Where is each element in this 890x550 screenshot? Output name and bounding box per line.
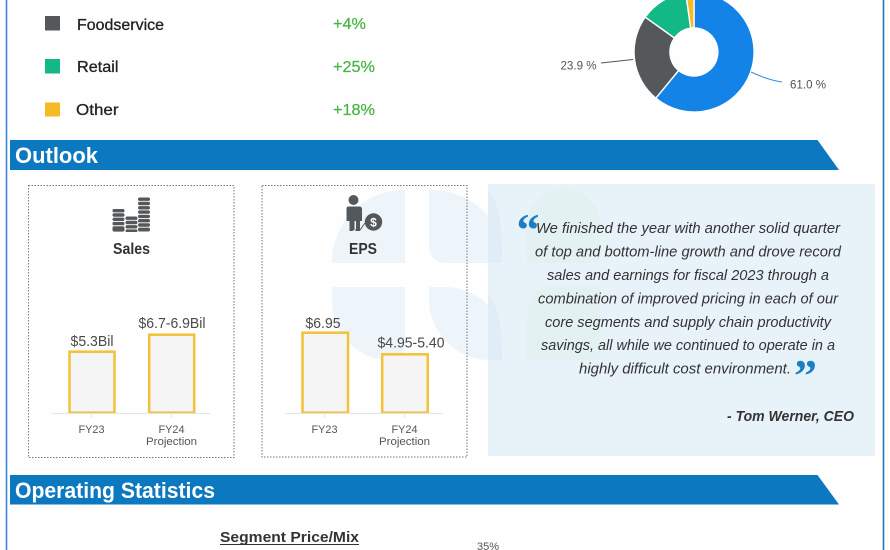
bar chart: Sales FY23 vs FY24: FY24 xyxy=(158,424,184,436)
quote text: savings, all while we continued to operate in a xyxy=(541,338,835,354)
watermark: background logo shapes xyxy=(332,190,505,360)
legend row: Retail: Retail xyxy=(77,59,118,76)
quote text: highly difficult cost environment. xyxy=(579,362,791,378)
bar chart: Sales FY23 vs FY24 xyxy=(52,315,210,448)
bar chart: EPS FY23 vs FY24: FY24 xyxy=(392,424,418,436)
bar chart: Sales FY23 vs FY24: $5.3Bil xyxy=(70,333,114,350)
bar chart: EPS FY23 vs FY24: $4.95-5.40 xyxy=(378,334,444,352)
legend row: Foodservice: +4% xyxy=(333,16,366,33)
legend row: Retail: +25% xyxy=(333,59,375,76)
donut label: 61.0% xyxy=(751,72,826,92)
quote text: sales and earnings for fiscal 2023 through a xyxy=(547,268,829,284)
donut slice: blue 61.0% xyxy=(656,0,754,112)
bar chart: EPS FY23 vs FY24: Projection xyxy=(379,436,430,448)
section header: Operating Statistics: Operating Statistics xyxy=(15,478,215,503)
icon: opening quote mark: “ xyxy=(516,204,540,255)
donut label: 23.9%: 23.9 % xyxy=(560,58,597,72)
icon: person with dollar coin: $ xyxy=(370,216,377,230)
panel: CEO quote xyxy=(488,184,875,456)
bar chart: EPS FY23 vs FY24: $6.95 xyxy=(306,315,340,332)
chart heading: Segment Price/Mix: Segment Price/Mix xyxy=(220,529,360,546)
bar chart: Sales FY23 vs FY24: Projection xyxy=(146,436,197,448)
legend row: Other xyxy=(45,102,375,119)
panel heading: EPS: EPS xyxy=(349,241,377,258)
donut label: 23.9% xyxy=(560,58,633,72)
section header: Operating Statistics xyxy=(10,475,839,504)
donut slice: yellow xyxy=(686,0,694,28)
legend row: Foodservice xyxy=(45,16,366,34)
bar chart: Sales FY23 vs FY24: FY23 xyxy=(78,424,104,436)
panel heading: Sales: Sales xyxy=(113,241,150,258)
donut label: 61.0%: 61.0 % xyxy=(790,78,826,92)
quote attribution: - Tom Werner, CEO xyxy=(727,408,854,425)
donut slice: green xyxy=(645,0,691,38)
bar chart: EPS FY23 vs FY24: FY23 xyxy=(312,424,338,436)
panel: Sales outlook xyxy=(28,186,234,458)
donut slice: grey 23.9% xyxy=(634,17,679,98)
quote text: core segments and supply chain productivity xyxy=(545,315,832,331)
icon: person with dollar coin xyxy=(346,195,382,231)
donut chart: revenue mix xyxy=(634,0,754,112)
legend: revenue segments xyxy=(45,16,375,119)
legend row: Retail xyxy=(45,59,375,76)
quote text: of top and bottom-line growth and drove record xyxy=(535,244,842,260)
section header: Outlook xyxy=(10,140,839,170)
legend row: Foodservice: Foodservice xyxy=(77,17,164,34)
panel: EPS outlook xyxy=(262,186,467,457)
quote text xyxy=(535,221,842,378)
section header: Outlook: Outlook xyxy=(15,143,99,168)
legend row: Other: Other xyxy=(76,102,119,119)
icon: closing quote mark: ” xyxy=(794,350,817,401)
bar chart: EPS FY23 vs FY24 xyxy=(285,315,444,448)
legend row: Other: +18% xyxy=(333,102,375,119)
quote text: We finished the year with another solid quarter xyxy=(536,221,841,237)
quote text: combination of improved pricing in each of our xyxy=(538,292,839,308)
icon: coin stacks xyxy=(112,198,150,232)
bar chart: Sales FY23 vs FY24: $6.7-6.9Bil xyxy=(138,315,206,332)
